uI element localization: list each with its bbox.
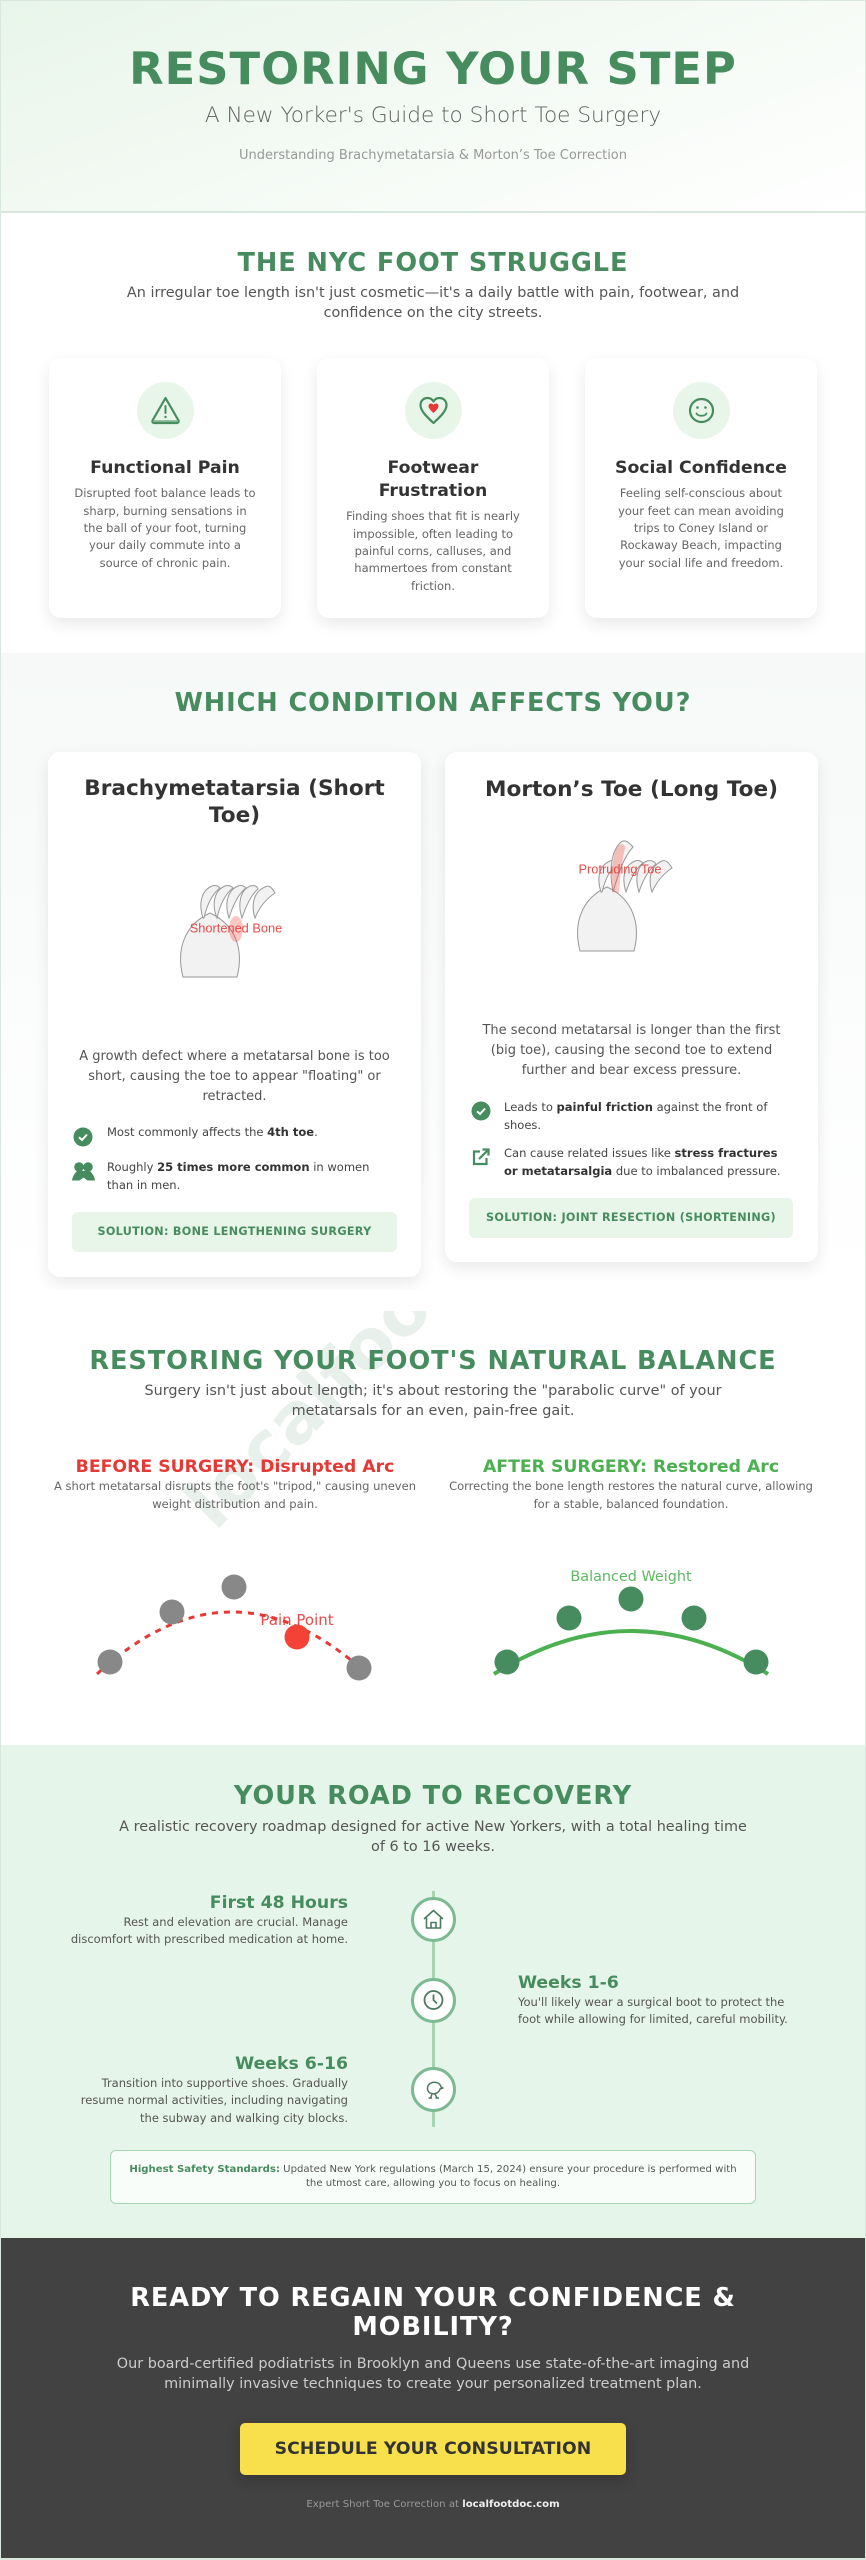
icon: check circle xyxy=(74,1128,92,1146)
bullet: painful friction xyxy=(504,1100,768,1132)
panel: restoring natural balance xyxy=(0,1290,866,1745)
section intro xyxy=(127,285,739,321)
tagline: Understanding Brachymetatarsia & Morton’s Toe Correction xyxy=(239,148,627,163)
card title: Toe) xyxy=(209,802,260,828)
cta heading: READY TO REGAIN YOUR CONFIDENCE & xyxy=(130,2282,736,2312)
solution badge xyxy=(72,1212,397,1252)
chart: restored arc xyxy=(493,1569,769,1676)
before heading: BEFORE SURGERY: Disrupted Arc xyxy=(76,1456,394,1476)
bullet: 25 times more common: Roughly 25 times more common in women xyxy=(107,1160,369,1174)
solution badge: SOLUTION: JOINT RESECTION (SHORTENING) xyxy=(486,1211,776,1224)
card text: Finding shoes that fit is nearly xyxy=(346,509,520,523)
bullet: painful friction: Leads to painful friction against the front of xyxy=(504,1100,767,1114)
card text: Disrupted foot balance leads to xyxy=(74,486,256,500)
button: SCHEDULE YOUR CONSULTATION xyxy=(275,2439,591,2459)
panel: road to recovery xyxy=(0,1745,866,2238)
section intro xyxy=(119,1819,747,1855)
header panel xyxy=(0,0,866,213)
card description xyxy=(482,1023,781,1078)
chart: disrupted arc xyxy=(96,1574,372,1680)
step title: Weeks 1-6 xyxy=(518,1973,619,1993)
card text: painful corns, calluses, and xyxy=(355,544,511,558)
bullet: related issues: or metatarsalgia due to imbalanced pressure. xyxy=(504,1164,781,1178)
card description: A growth defect where a metatarsal bone is too xyxy=(79,1049,390,1064)
card text: Feeling self-conscious about xyxy=(620,486,782,500)
card text: sharp, burning sensations in xyxy=(83,504,247,518)
step text: Rest and elevation are crucial. Manage xyxy=(123,1915,348,1929)
timeline node: walking xyxy=(410,2066,456,2112)
card: social confidence xyxy=(585,358,817,618)
bullet: 4th toe: Most commonly affects the 4th toe. xyxy=(107,1125,318,1139)
section intro: An irregular toe length isn't just cosmetic—it's a daily battle with pain, footwear, and xyxy=(127,285,739,301)
step text: You'll likely wear a surgical boot to protect the xyxy=(518,1995,784,2009)
section intro xyxy=(144,1383,722,1419)
card title: Functional Pain xyxy=(90,458,240,478)
diagram: short toe foot: Shortened Bone xyxy=(190,920,282,936)
card text: your feet can mean avoiding xyxy=(618,504,784,518)
card description: The second metatarsal is longer than the first xyxy=(482,1023,781,1038)
after text: Correcting the bone length restores the natural curve, allowing xyxy=(449,1479,813,1493)
timeline node: house xyxy=(410,1896,456,1942)
cta heading: MOBILITY? xyxy=(352,2312,514,2342)
icon: external link xyxy=(472,1148,490,1166)
section heading: YOUR ROAD TO RECOVERY xyxy=(234,1781,632,1811)
chart: restored arc: Balanced Weight xyxy=(570,1569,692,1585)
step text: Transition into supportive shoes. Gradually xyxy=(102,2076,348,2090)
solution badge xyxy=(469,1198,793,1238)
card: morton's toe xyxy=(445,752,818,1262)
cta text: minimally invasive techniques to create your personalized treatment plan. xyxy=(164,2376,702,2392)
bullet: related issues xyxy=(504,1146,781,1178)
after heading: AFTER SURGERY: Restored Arc xyxy=(483,1456,779,1476)
diagram: long toe foot: Protruding Toe xyxy=(578,862,662,876)
card text: friction. xyxy=(411,579,455,593)
card text: source of chronic pain. xyxy=(100,556,230,570)
card title: Social Confidence xyxy=(615,458,787,478)
diagram: short toe foot xyxy=(180,885,282,978)
step text: discomfort with prescribed medication at home. xyxy=(71,1932,348,1946)
card text: Rockaway Beach, impacting xyxy=(620,538,782,552)
diagram: long toe foot xyxy=(577,840,673,952)
bullet: painful friction: shoes. xyxy=(504,1118,541,1132)
card text: your daily commute into a xyxy=(89,538,241,552)
card text xyxy=(74,486,256,570)
button xyxy=(240,2423,626,2475)
main title: RESTORING YOUR STEP xyxy=(129,42,737,95)
icon: heart xyxy=(404,382,462,439)
card text xyxy=(346,509,520,593)
card text: the ball of your foot, turning xyxy=(84,521,246,535)
card text: trips to Coney Island or xyxy=(634,521,768,535)
timeline line xyxy=(432,1891,434,2127)
icon: smiley xyxy=(672,382,730,439)
step text xyxy=(518,1995,788,2026)
icon: warning triangle xyxy=(136,382,194,439)
step: first 48 hours xyxy=(71,1893,348,1946)
section intro: A realistic recovery roadmap designed for active New Yorkers, with a total healing time xyxy=(119,1819,747,1835)
safety callout: Highest Safety Standards: Updated New York regulations (March 15, 2024) ensure your procedure is performed with xyxy=(129,2164,737,2174)
section intro: of 6 to 16 weeks. xyxy=(371,1839,495,1855)
step title: Weeks 6-16 xyxy=(235,2054,348,2074)
step title: First 48 Hours xyxy=(210,1893,348,1913)
step text: foot while allowing for limited, careful mobility. xyxy=(518,2012,788,2026)
footer note: Expert Short Toe Correction at localfootdoc.com xyxy=(306,2499,560,2510)
card title: Morton’s Toe (Long Toe) xyxy=(485,776,778,802)
panel: call to action xyxy=(0,2238,866,2560)
after text: for a stable, balanced foundation. xyxy=(534,1497,728,1511)
card title xyxy=(84,776,385,828)
icon: check circle xyxy=(472,1102,490,1120)
panel: which condition affects you xyxy=(0,653,866,1290)
solution badge: SOLUTION: BONE LENGTHENING SURGERY xyxy=(98,1225,371,1238)
after text xyxy=(449,1479,813,1511)
card: brachymetatarsia xyxy=(48,752,421,1277)
section intro: Surgery isn't just about length; it's about restoring the "parabolic curve" of your xyxy=(144,1383,722,1399)
section heading: WHICH CONDITION AFFECTS YOU? xyxy=(175,688,691,718)
card description: retracted. xyxy=(202,1089,267,1104)
card description: (big toe), causing the second toe to extend xyxy=(491,1043,772,1058)
before text xyxy=(54,1479,416,1511)
card text: your social life and freedom. xyxy=(619,556,783,570)
card title: Frustration xyxy=(379,480,487,500)
card title: Brachymetatarsia (Short xyxy=(84,776,385,800)
step text xyxy=(71,1915,348,1946)
subtitle: A New Yorker's Guide to Short Toe Surgery xyxy=(205,103,661,128)
section intro: confidence on the city streets. xyxy=(324,305,542,321)
section heading: THE NYC FOOT STRUGGLE xyxy=(238,248,628,278)
card description: further and bear excess pressure. xyxy=(522,1063,741,1078)
chart: disrupted arc: Pain Point xyxy=(260,1611,334,1629)
card: footwear frustration xyxy=(317,358,549,618)
card text xyxy=(618,486,784,570)
card title xyxy=(379,458,487,500)
bullet: 25 times more common xyxy=(107,1160,369,1192)
cta text xyxy=(117,2356,749,2392)
before text: weight distribution and pain. xyxy=(152,1497,318,1511)
step: weeks 1-6 xyxy=(518,1973,788,2026)
step text xyxy=(81,2076,348,2125)
step text: the subway and walking city blocks. xyxy=(140,2111,348,2125)
cta text: Our board-certified podiatrists in Brooklyn and Queens use state-of-the-art imaging and xyxy=(117,2356,749,2372)
icon: people xyxy=(72,1162,95,1180)
safety callout: the utmost care, allowing you to focus on healing. xyxy=(306,2178,560,2189)
panel: the NYC foot struggle xyxy=(0,213,866,653)
section intro: metatarsals for an even, pain-free gait. xyxy=(292,1403,574,1419)
card title: Footwear xyxy=(388,458,478,478)
card description: short, causing the toe to appear "floating" or xyxy=(88,1069,381,1084)
safety callout xyxy=(110,2150,756,2204)
step: weeks 6-16 xyxy=(81,2054,348,2125)
bullet: related issues: Can cause related issues like stress fractures xyxy=(504,1146,777,1160)
section heading: RESTORING YOUR FOOT'S NATURAL BALANCE xyxy=(89,1346,777,1376)
card: functional pain xyxy=(49,358,281,618)
card description xyxy=(79,1049,390,1104)
card text: hammertoes from constant xyxy=(354,561,512,575)
bullet: 25 times more common: than in men. xyxy=(107,1178,180,1192)
cta heading xyxy=(130,2282,736,2342)
step text: resume normal activities, including navigating xyxy=(81,2093,348,2107)
timeline node: clock xyxy=(410,1978,456,2022)
card text: impossible, often leading to xyxy=(353,527,513,541)
before text: A short metatarsal disrupts the foot's "tripod," causing uneven xyxy=(54,1479,416,1493)
